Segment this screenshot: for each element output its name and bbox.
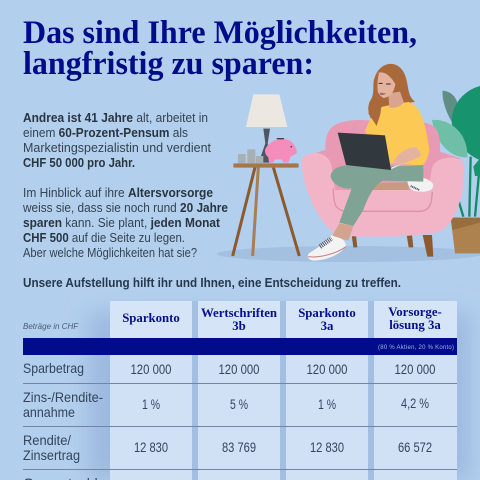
column: Wertschriften 3b [198, 301, 280, 480]
navy header bar [23, 338, 457, 355]
column: Sparkonto 3a: 3a [321, 319, 334, 333]
text block: retirement question: CHF 500 auf die Seite zu legen. [23, 231, 185, 245]
row: Rendite/Zinsertrag [23, 432, 432, 463]
icon: lamp [246, 94, 287, 163]
table shadow [88, 301, 470, 480]
sweater [365, 102, 429, 165]
face [377, 72, 395, 98]
column: Vorsorgelösung 3a: lösung 3a [389, 318, 441, 332]
text block: intro Andrea: Marketingspezialistin und verdient [23, 141, 211, 155]
back leg and foot [368, 182, 410, 190]
row: Rendite/Zinsertrag: Zinsertrag [23, 447, 80, 463]
text block: intro Andrea [23, 111, 211, 170]
floor shadow [217, 246, 480, 262]
icon: laptop [338, 133, 391, 170]
row: Zins-/Renditeannahme: 5 % [230, 397, 248, 412]
icon: woman [308, 64, 433, 261]
navy header bar: (80 % Aktien, 20 % Konto) [378, 345, 454, 351]
row: Sparbetrag: Sparbetrag [23, 360, 84, 376]
comparison table [23, 301, 470, 480]
text block: intro Andrea: CHF 50 000 pro Jahr. [23, 156, 135, 170]
icon: coin stacks [238, 149, 263, 163]
icon: plant [432, 86, 480, 253]
row: Rendite/Zinsertrag: 12 830 [310, 440, 344, 455]
row: Rendite/Zinsertrag: 12 830 [134, 440, 168, 455]
text block: retirement question: sparen kann. Sie plant, jeden Monat [23, 216, 221, 230]
text block: intro Andrea: Andrea ist 41 Jahre alt, arbeitet in [23, 111, 208, 125]
column: Vorsorgelösung 3a [374, 301, 457, 480]
row: Zins-/Renditeannahme [23, 389, 429, 420]
illustration: woman on armchair with side table [217, 64, 480, 262]
row: Zins-/Renditeannahme: Zins-/Rendite- [23, 389, 103, 405]
row: Zins-/Renditeannahme: 4,2 % [401, 396, 429, 411]
row: Zins-/Renditeannahme: 1 % [142, 397, 160, 412]
row: Rendite/Zinsertrag: Rendite/ [23, 432, 71, 448]
title: langfristig zu sparen: [23, 46, 314, 82]
front shoe [308, 235, 346, 261]
icon: piggy bank [265, 138, 297, 163]
column: Vorsorgelösung 3a: Vorsorge- [388, 305, 442, 319]
row: Sparbetrag: 120 000 [218, 362, 260, 377]
text block: intro Andrea: einem 60-Prozent-Pensum als [23, 126, 188, 140]
legs [331, 165, 423, 226]
row: Zins-/Renditeannahme: annahme [23, 404, 75, 420]
column: Sparkonto 3a [286, 301, 368, 480]
text block: retirement question: Im Hinblick auf ihre Altersvorsorge [23, 186, 213, 200]
row: Rendite/Zinsertrag: 83 769 [222, 440, 256, 455]
row dividers [23, 384, 457, 470]
icon: armchair [302, 120, 464, 257]
unit note: Beträge in CHF [23, 322, 79, 331]
row: Sparbetrag: 120 000 [306, 362, 348, 377]
column: Sparkonto 3a: Sparkonto [298, 306, 356, 320]
row: Zins-/Renditeannahme: 1 % [318, 397, 336, 412]
text block: retirement question [22, 186, 228, 260]
column: Sparkonto [110, 301, 192, 480]
row: Sparbetrag: 120 000 [394, 362, 436, 377]
row: Rendite/Zinsertrag: 66 572 [398, 440, 432, 455]
text block: retirement question: weiss sie, dass sie noch rund 20 Jahre [22, 201, 228, 215]
neck [388, 92, 404, 108]
subheading: Unsere Aufstellung hilft ihr und Ihnen, eine Entscheidung zu treffen. [23, 275, 401, 290]
hair front [368, 72, 381, 126]
column: Wertschriften 3b: Wertschriften [201, 306, 277, 320]
text block: retirement question: Aber welche Möglichkeiten hat sie? [23, 246, 197, 260]
icon: side table [233, 163, 299, 256]
title: Das sind Ihre Möglichkeiten, [23, 15, 417, 51]
row: Sparbetrag: 120 000 [130, 362, 172, 377]
hair back [368, 64, 415, 126]
column: Wertschriften 3b: 3b [232, 319, 246, 333]
column: Sparkonto: Sparkonto [122, 311, 180, 325]
arm [393, 147, 422, 165]
row: Sparbetrag [23, 360, 436, 377]
